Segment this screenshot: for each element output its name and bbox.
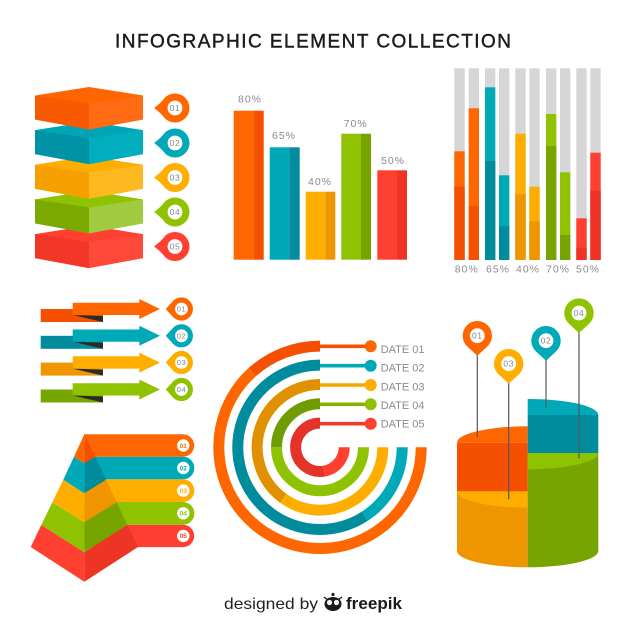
block 05 red [35, 226, 143, 268]
pin 02 and stem: 02 [541, 336, 551, 346]
pin 01 and stem [463, 321, 492, 437]
teal columns [485, 87, 509, 260]
green columns [546, 114, 570, 260]
arrow 03 [41, 353, 160, 376]
grey column tracks [454, 68, 601, 260]
date row 04 [320, 398, 425, 412]
orange segment [457, 426, 528, 491]
bar 65% [270, 130, 300, 260]
pin 01 [154, 94, 190, 122]
banner 03: 03 [180, 488, 187, 495]
ring 02 teal [238, 365, 402, 530]
arrow 02 [41, 326, 160, 349]
block 04 green [35, 191, 143, 233]
ring 03 amber [257, 384, 383, 510]
bar 70%: 70% [344, 118, 368, 130]
pin 03 and stem [494, 349, 523, 499]
date row 05: DATE 05 [381, 418, 425, 430]
bar 80% [234, 94, 264, 260]
panel: bar chart [234, 94, 407, 260]
banner 02 [84, 457, 194, 479]
footer: freepik credit [224, 593, 403, 613]
banner 01 [84, 434, 194, 457]
pyramid teal layer [63, 457, 106, 493]
column percentage labels: 70% [546, 264, 570, 276]
block 03 amber [35, 156, 143, 199]
pin 04: 04 [170, 207, 180, 217]
date row 04: DATE 04 [381, 400, 425, 412]
arrow pin 03: 03 [177, 358, 186, 367]
pin 03 and stem: 03 [503, 359, 514, 369]
pyramid amber layer [52, 480, 117, 522]
column percentage labels: 40% [516, 264, 540, 276]
icon: freepik mascot [324, 593, 342, 611]
arrow 04 [41, 380, 160, 402]
pin 02: 02 [170, 138, 180, 148]
amber segment [457, 491, 528, 567]
arrow pin 04 [166, 378, 193, 401]
date row 02 [320, 360, 425, 375]
arrow pin 01 [166, 297, 193, 321]
green segment [528, 453, 598, 567]
banner 05 [84, 525, 194, 547]
arrow pin 02 [166, 324, 193, 347]
teal segment [528, 399, 598, 453]
block 01 orange [35, 87, 143, 130]
ring 04 green [276, 404, 364, 491]
pin 02 and stem [531, 326, 561, 407]
banner 03 [84, 479, 194, 502]
panel: paired column chart [454, 68, 601, 276]
arrow pin 04: 04 [177, 385, 186, 394]
orange columns [454, 108, 479, 260]
arrow pin 03 [166, 351, 193, 374]
credit text: designed by [224, 596, 318, 613]
red columns [576, 153, 601, 260]
column percentage labels [455, 264, 600, 276]
block 02 teal [35, 122, 143, 164]
column percentage labels: 50% [576, 264, 600, 276]
pin 02 [154, 128, 190, 158]
pin 03: 03 [170, 172, 180, 182]
pyramid red layer [31, 525, 138, 582]
bar 80%: 80% [238, 94, 262, 106]
date row 01: DATE 01 [381, 344, 425, 356]
pin 04 and stem: 04 [574, 308, 584, 318]
arrow 01 [41, 299, 160, 322]
panel: pyramid [31, 434, 194, 582]
bar 40%: 40% [308, 176, 332, 188]
panel: cylinder chart [457, 298, 598, 567]
date row 01 [320, 340, 425, 356]
date row 03: DATE 03 [381, 381, 425, 393]
banner 04 [84, 502, 194, 525]
ring 05 red [296, 423, 344, 471]
date row 02: DATE 02 [381, 363, 425, 375]
column percentage labels: 80% [455, 264, 479, 276]
panel: radial chart [219, 340, 425, 549]
date row 05 [320, 418, 425, 430]
pyramid orange layer [74, 434, 95, 463]
column percentage labels: 65% [486, 264, 510, 276]
pin 05: 05 [170, 242, 180, 252]
arrow pin 02: 02 [177, 331, 186, 340]
pin 03 [154, 163, 190, 192]
pin 04 [154, 198, 190, 226]
title: INFOGRAPHIC ELEMENT COLLECTION [115, 31, 511, 52]
panel: stacked 3D blocks [35, 87, 190, 268]
ring 01 orange [219, 346, 421, 549]
banner 02: 02 [180, 465, 187, 472]
bar 65%: 65% [272, 130, 296, 142]
bar 50% [377, 155, 407, 260]
banner 04: 04 [180, 511, 187, 518]
pin 04 and stem [564, 298, 594, 458]
banner 05: 05 [180, 533, 187, 540]
arrow pin 01: 01 [177, 305, 186, 314]
bar 40% [306, 176, 335, 260]
bar 50%: 50% [381, 155, 405, 167]
bar 70% [341, 118, 371, 260]
amber columns [515, 134, 540, 260]
banner 01: 01 [180, 443, 187, 450]
pin 01 and stem: 01 [472, 331, 483, 341]
pin 01: 01 [170, 103, 180, 113]
date row 03 [320, 379, 425, 393]
freepik wordmark: freepik [346, 594, 403, 613]
pyramid green layer [41, 502, 127, 552]
panel: arrows [41, 297, 193, 402]
pin 05 [154, 232, 190, 261]
